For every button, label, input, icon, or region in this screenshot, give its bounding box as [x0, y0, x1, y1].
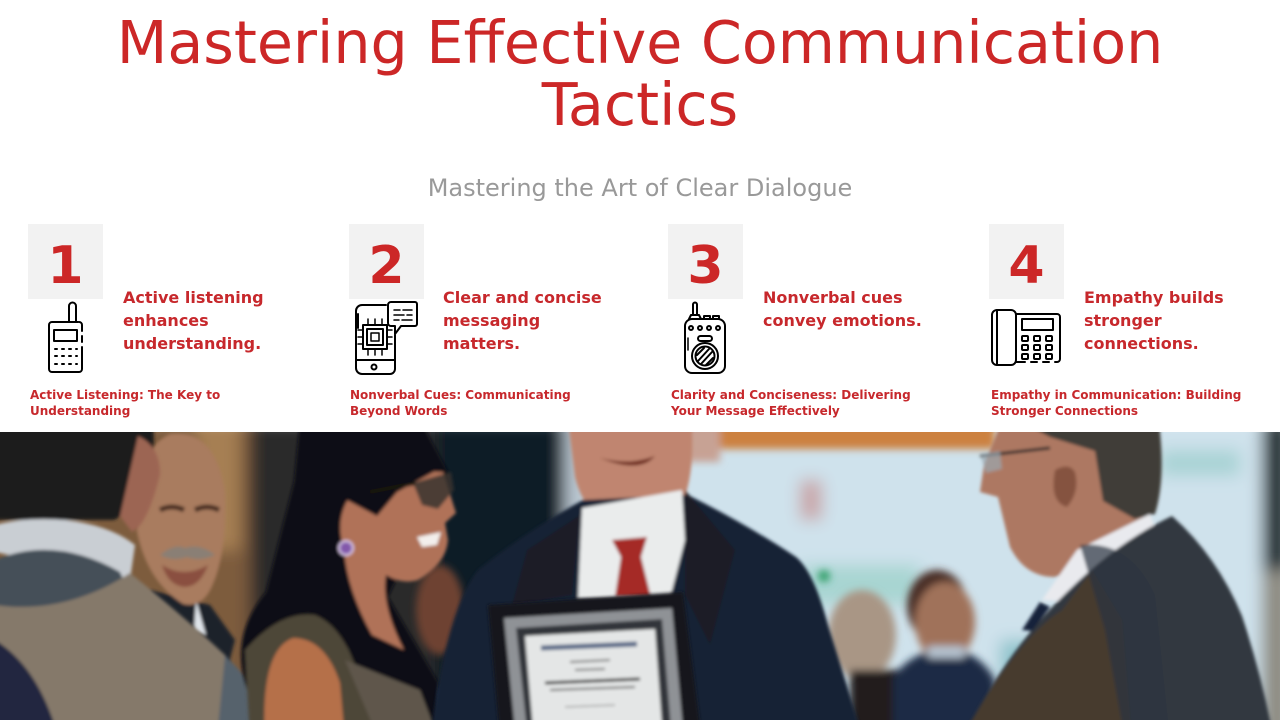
caption: Clarity and Conciseness: Delivering Your Message Effectively	[671, 388, 911, 418]
number 3	[668, 224, 743, 299]
icon: portable radio	[684, 302, 726, 374]
screen header bar	[680, 420, 995, 462]
person: smiling woman with glasses	[241, 420, 456, 720]
panel: step 3 nonverbal cues	[668, 224, 922, 418]
number 1	[28, 224, 103, 299]
person: central man in dark suit with red tie	[430, 420, 864, 720]
key point text: Active listening enhances understanding.	[123, 288, 264, 353]
icon: smartphone with chip and chat bubble	[355, 301, 418, 375]
photo: people at an award presentation	[0, 432, 1280, 720]
title	[117, 9, 1163, 139]
number 4: 4	[1008, 236, 1045, 296]
caption: Nonverbal Cues: Communicating Beyond Words	[350, 388, 571, 418]
number 3: 3	[687, 236, 724, 296]
background: venue and screen	[0, 420, 1280, 720]
panel: step 4 empathy	[989, 224, 1241, 418]
title: Mastering Effective Communication	[117, 9, 1163, 77]
number 2: 2	[368, 236, 405, 296]
caption: Active Listening: The Key to Understanding	[30, 388, 220, 418]
person: man from behind on the left	[0, 420, 282, 720]
title: Tactics	[542, 71, 738, 139]
number 1: 1	[47, 236, 84, 296]
key point text: Nonverbal cues convey emotions.	[763, 288, 922, 330]
panel: step 1 active listening	[28, 224, 264, 418]
icon: walkie talkie	[48, 302, 83, 373]
key point text: Empathy builds stronger connections.	[1084, 288, 1224, 353]
person: man with glasses on the right	[960, 420, 1274, 720]
subtitle: Mastering the Art of Clear Dialogue	[428, 174, 852, 202]
icon: desk telephone	[991, 309, 1061, 366]
background crowd	[416, 565, 995, 720]
caption: Empathy in Communication: Building Stronger Connections	[991, 388, 1241, 418]
number 4	[989, 224, 1064, 299]
panel: step 2 clear messaging	[349, 224, 602, 418]
number 2	[349, 224, 424, 299]
person: bald man with mustache	[135, 433, 235, 720]
key point text: Clear and concise messaging matters.	[443, 288, 602, 353]
framed certificate	[488, 592, 702, 720]
